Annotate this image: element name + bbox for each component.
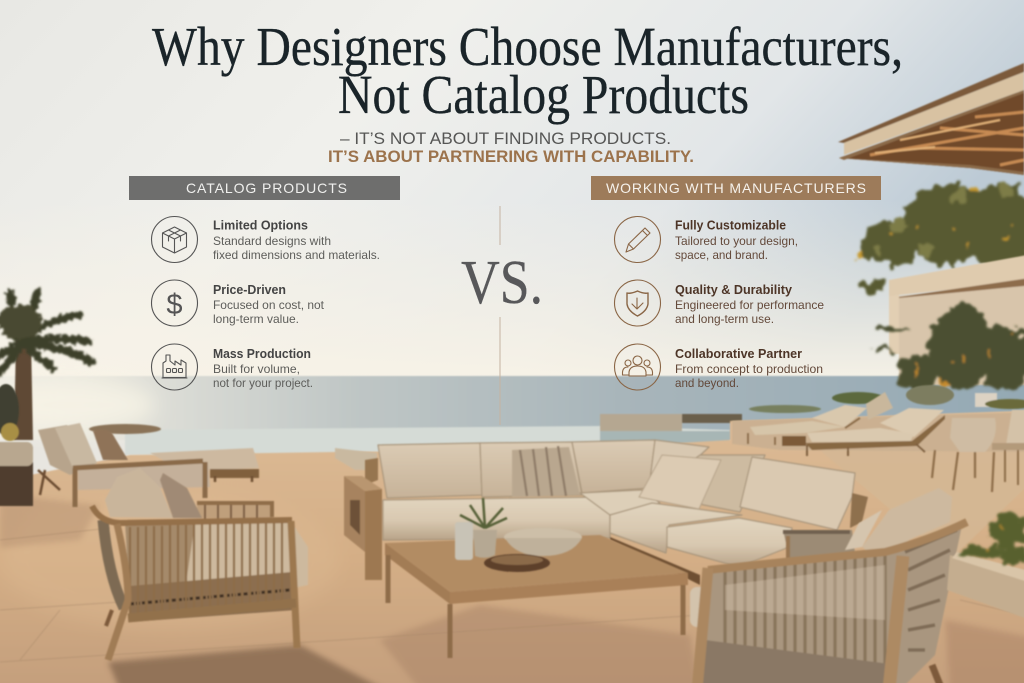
- icon: pencil: [614, 216, 660, 262]
- title: Why Designers Choose Manufacturers,: [152, 16, 903, 77]
- icon: factory: [152, 344, 198, 390]
- icon: shield: [614, 280, 660, 326]
- title: Not Catalog Products: [338, 64, 749, 125]
- item: fully customizable: Fully Customizable: [675, 218, 786, 232]
- sectional sofa: [344, 440, 868, 585]
- building balcony and wall: [889, 252, 1024, 385]
- subtitle: [328, 129, 694, 166]
- left palm tree: [0, 292, 92, 441]
- item: price-driven: [152, 280, 325, 326]
- building pergola: [838, 63, 1024, 175]
- item: collaborative partner: From concept to production: [675, 362, 823, 376]
- subtitle: IT’S ABOUT PARTNERING WITH CAPABILITY.: [328, 147, 694, 166]
- catalog products header: CATALOG PRODUCTS: [186, 180, 347, 196]
- item: quality and durability: Quality & Durability: [675, 283, 792, 297]
- item: mass production: not for your project.: [213, 376, 313, 390]
- item: collaborative partner: Collaborative Partner: [675, 347, 802, 361]
- distant sun loungers and platform: [732, 392, 1024, 492]
- panel: catalog products: [129, 176, 400, 390]
- item: quality and durability: Engineered for performance: [675, 298, 824, 312]
- manufacturers header: WORKING WITH MANUFACTURERS: [606, 180, 866, 196]
- item: price-driven: Price-Driven: [213, 283, 286, 297]
- terrace floor: [0, 410, 1024, 683]
- manufacturers header: [591, 176, 881, 200]
- left armchair: [92, 468, 308, 660]
- subtitle: – IT’S NOT ABOUT FINDING PRODUCTS.: [340, 129, 671, 148]
- right rope armchair: [690, 488, 967, 683]
- item: limited options: [152, 216, 380, 262]
- VS. divider: VS.: [461, 249, 543, 317]
- item: limited options: Limited Options: [213, 218, 308, 232]
- item: fully customizable: space, and brand.: [675, 248, 768, 262]
- upper tree: [857, 183, 1024, 292]
- item: price-driven: long-term value.: [213, 312, 299, 326]
- item: fully customizable: Tailored to your design,: [675, 234, 798, 248]
- item: quality and durability: and long-term use.: [675, 312, 774, 326]
- item: limited options: fixed dimensions and materials.: [213, 248, 380, 262]
- lower trees: [875, 306, 1024, 390]
- tabletop objects: [455, 498, 582, 572]
- item: price-driven: Focused on cost, not: [213, 298, 325, 312]
- panel: working with manufacturers: [591, 176, 881, 390]
- item: mass production: Mass Production: [213, 347, 311, 361]
- item: collaborative partner: [614, 344, 823, 390]
- icon: dollar sign: [152, 280, 198, 326]
- planter and shrubs: [947, 512, 1024, 625]
- item: mass production: Built for volume,: [213, 362, 300, 376]
- icon: box: [152, 216, 198, 262]
- item: collaborative partner: and beyond.: [675, 376, 739, 390]
- icon: dollar sign: $: [166, 289, 183, 321]
- shoreline shrubs: [89, 385, 1024, 434]
- icon: people: [614, 344, 660, 390]
- sea: [0, 376, 1024, 440]
- item: limited options: Standard designs with: [213, 234, 331, 248]
- left distant lounge set: [0, 423, 377, 507]
- coffee table: [385, 535, 688, 658]
- sky: [0, 0, 1024, 380]
- infinity pool: [125, 414, 742, 455]
- item: quality and durability: [614, 280, 824, 326]
- item: mass production: [152, 344, 313, 390]
- title: [152, 16, 903, 125]
- item: fully customizable: [614, 216, 798, 262]
- catalog products header: [129, 176, 400, 200]
